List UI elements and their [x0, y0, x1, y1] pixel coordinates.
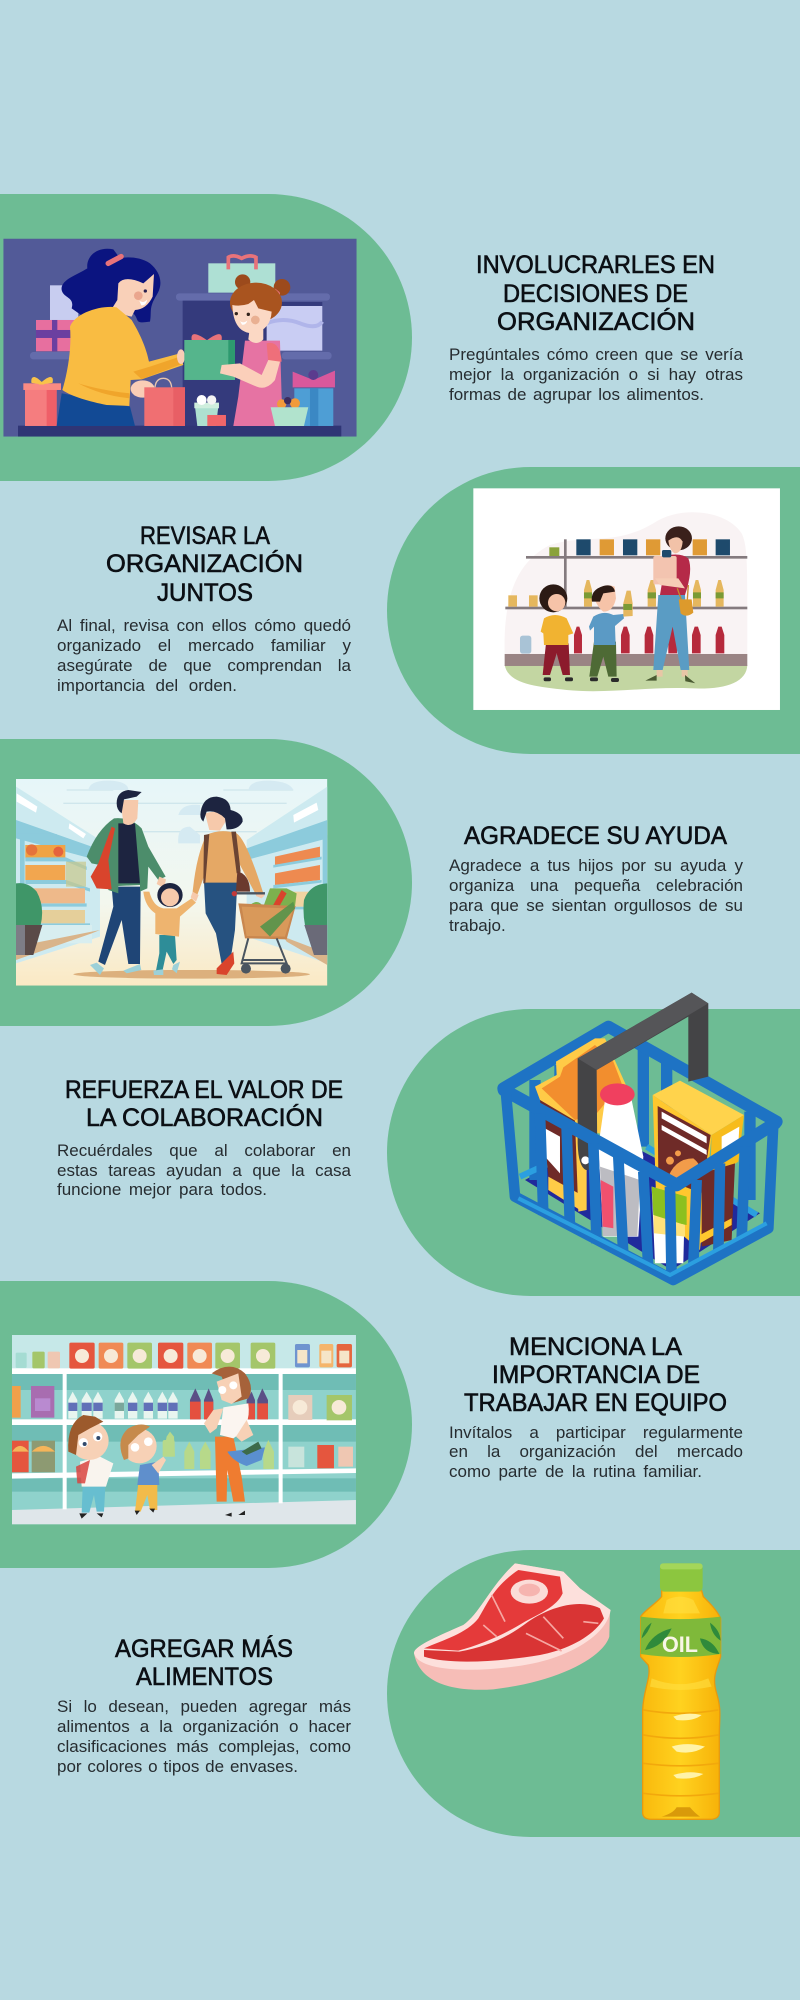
heading: refuerza: LA COLABORACIÓN: [86, 1103, 323, 1132]
figure: mother: [191, 797, 265, 975]
illustration: oil bottle: [641, 1563, 721, 1819]
figure: shopping cart: [232, 888, 297, 974]
body text: menciona: como parte de la rutina familiar.: [449, 1462, 702, 1481]
panel 4: refuerza: [387, 993, 800, 1296]
panel 5: menciona: [0, 1281, 412, 1568]
body text: menciona: en la organización del mercado: [449, 1442, 743, 1461]
body text: menciona: Invítalos a participar regularmente: [449, 1423, 743, 1442]
body text: agregar: por colores o tipos de envases.: [57, 1757, 298, 1776]
text block: involucrarles: [449, 251, 743, 407]
body text: agradece: Agradece a tus hijos por su ayuda y: [449, 856, 743, 875]
body text: agradece: [449, 856, 743, 938]
heading: menciona: [464, 1333, 727, 1417]
heading: agregar: AGREGAR MÁS: [115, 1634, 293, 1663]
heading: refuerza: [65, 1076, 343, 1132]
illustration: steak: [414, 1563, 611, 1690]
heading: revisar: [106, 522, 303, 607]
body text: agregar: Si lo desean, pueden agregar más: [57, 1697, 351, 1716]
panel 3: agradece: [0, 739, 412, 1026]
body text: agregar: [57, 1697, 351, 1779]
heading: involucrarles: [476, 251, 715, 336]
text block: agradece: [449, 822, 743, 938]
body text: revisar: [57, 616, 351, 698]
illustration: shopping basket: [503, 993, 777, 1282]
heading: menciona: IMPORTANCIA DE: [492, 1361, 700, 1389]
heading: involucrarles: ORGANIZACIÓN: [497, 307, 695, 336]
heading: refuerza: REFUERZA EL VALOR DE: [65, 1076, 343, 1104]
products: lower shelf: [12, 1432, 353, 1472]
body text: involucrarles: formas de agrupar los alimentos.: [449, 385, 704, 404]
body text: involucrarles: Pregúntales cómo creen que se vería: [449, 345, 743, 364]
item: milk carton: [535, 1038, 627, 1212]
heading: revisar: JUNTOS: [157, 579, 253, 607]
body text: involucrarles: mejor la organización o si hay otras: [449, 365, 743, 384]
heading: involucrarles: DECISIONES DE: [503, 280, 688, 308]
body text: menciona: [449, 1423, 743, 1484]
products: middle shelf bottles: [12, 1386, 352, 1420]
body text: refuerza: estas tareas ayudan a que la casa: [57, 1161, 351, 1180]
figure: boy reaching: [120, 1425, 175, 1515]
text block: agregar: [57, 1634, 351, 1779]
figure: boy with backpack: [68, 1415, 113, 1519]
heading: involucrarles: INVOLUCRARLES EN: [476, 251, 715, 279]
body text: refuerza: funcione mejor para todos.: [57, 1180, 267, 1199]
heading: menciona: TRABAJAR EN EQUIPO: [464, 1389, 727, 1417]
heading: agregar: ALIMENTOS: [136, 1663, 273, 1691]
illustration: mother and daughter with gifts: [3, 239, 357, 437]
figure: mother with basket: [204, 1367, 265, 1517]
panel 6: agregar: [387, 1550, 800, 1837]
body text: revisar: asegúrate de que comprendan la: [57, 656, 351, 675]
figure: father: [87, 790, 166, 975]
item: cereal box: [652, 1081, 744, 1263]
body text: revisar: organizado el mercado familiar y: [57, 636, 351, 655]
figure: boy with bottle: [589, 585, 633, 682]
illustration: oil bottle: OIL: [662, 1632, 698, 1657]
body text: refuerza: Recuérdales que al colaborar en: [57, 1141, 351, 1160]
illustration: mother and kids in shop aisle: [12, 1335, 356, 1524]
illustration: mother and sons at shelf: [473, 488, 780, 710]
handle: [578, 993, 708, 1170]
panel 2: revisar: [387, 467, 800, 754]
illustration: family in supermarket aisle: [16, 779, 327, 986]
body text: involucrarles: [449, 345, 743, 407]
body text: revisar: importancia del orden.: [57, 676, 237, 695]
text block: menciona: [449, 1333, 743, 1484]
products: top shelf bags: [16, 1343, 352, 1369]
figure: mother with paper bag: [645, 526, 695, 683]
text block: revisar: [57, 522, 351, 698]
body text: agradece: trabajo.: [449, 916, 506, 935]
heading: revisar: REVISAR LA: [140, 522, 270, 550]
figure: boy with backpack: [539, 584, 573, 681]
body text: agradece: para que se sientan orgullosos de su: [449, 896, 743, 915]
heading: revisar: ORGANIZACIÓN: [106, 549, 303, 578]
heading: menciona: MENCIONA LA: [509, 1333, 682, 1361]
body text: revisar: Al final, revisa con ellos cómo quedó: [57, 616, 351, 635]
item: bottle: [598, 1083, 643, 1237]
heading: agregar: [115, 1634, 293, 1691]
text block: refuerza: [57, 1076, 351, 1202]
figure: child: [143, 883, 196, 975]
body text: refuerza: [57, 1141, 351, 1202]
body text: agregar: alimentos a la organización o hacer: [57, 1717, 351, 1736]
body text: agregar: clasificaciones más complejas, como: [57, 1737, 351, 1756]
body text: agradece: organiza una pequeña celebración: [449, 876, 743, 895]
heading: agradece: AGRADECE SU AYUDA: [464, 822, 727, 850]
panel 1: involucrarles: [0, 194, 412, 481]
